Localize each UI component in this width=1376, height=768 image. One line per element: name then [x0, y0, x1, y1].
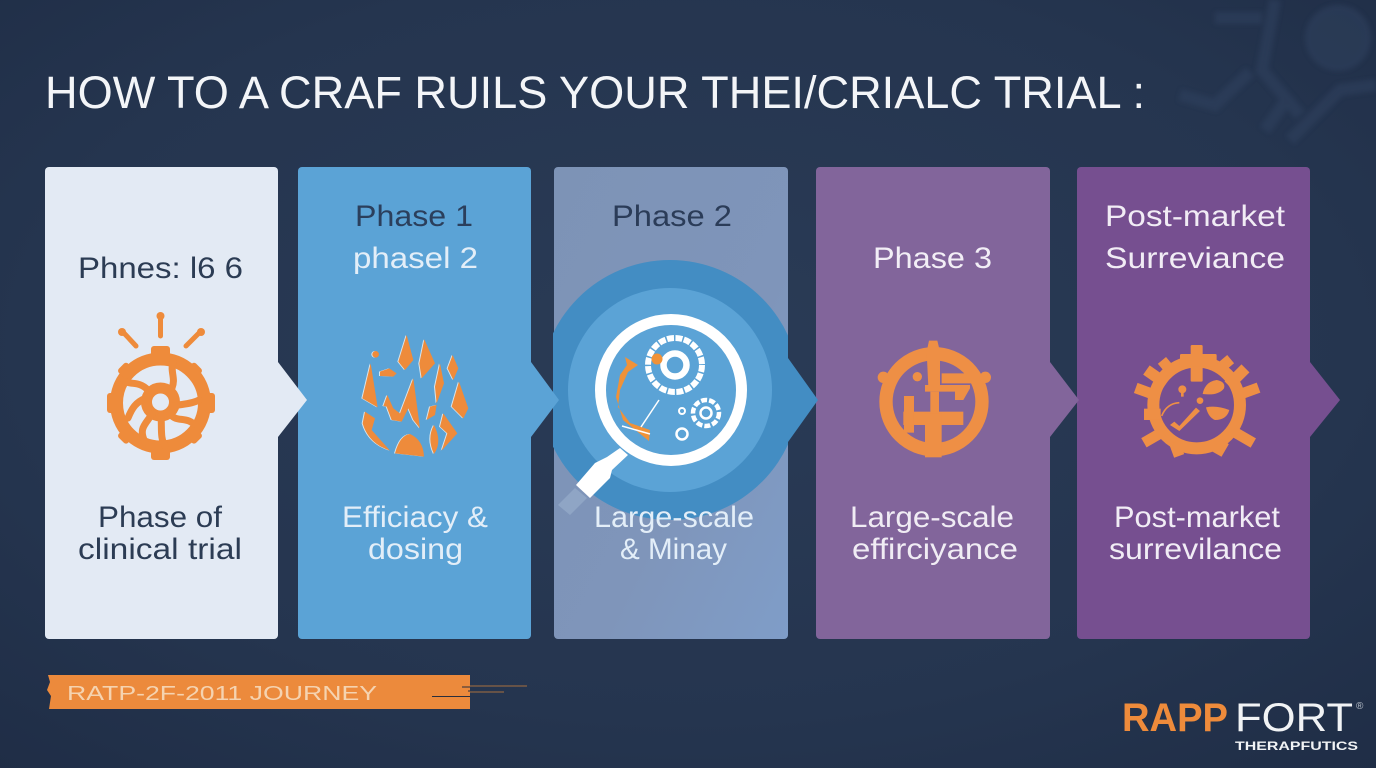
- caption: phase 3: effirciyance: [852, 533, 1018, 566]
- caption: post-market: surrevilance: [1109, 533, 1282, 566]
- caption: phase 2: [594, 501, 754, 566]
- caption: phase 3: Large-scale: [850, 501, 1014, 534]
- heading: phase 3: Phase 3: [873, 242, 992, 275]
- caption: phase 1: dosing: [368, 533, 463, 566]
- caption: phase 3: [850, 501, 1018, 566]
- heading: phase 2: Phase 2: [612, 200, 732, 233]
- heading: phase 1: phasel 2: [353, 242, 478, 275]
- panel: phase 3: [816, 167, 1079, 639]
- arrow: panel 5 exit: [1310, 362, 1340, 437]
- caption: phase 1: Efficiacy &: [342, 501, 488, 534]
- heading: post-market: Surreviance: [1105, 242, 1285, 275]
- caption: post-market: Post-market: [1114, 501, 1281, 534]
- small gear: [693, 400, 719, 426]
- arrow: panel 4 to panel 5: [1050, 362, 1079, 437]
- panel: phase 2: [540, 167, 818, 639]
- heading: phase 1: [353, 200, 478, 275]
- caption: phase 2: & Minay: [620, 533, 727, 566]
- decorative faint gears, top right: [1180, 0, 1376, 140]
- caption: panel 1: [78, 501, 242, 566]
- panel: phase 1: [298, 167, 559, 639]
- caption: phase 2: Large-scale: [594, 501, 754, 534]
- logo: Rappfort Therapeutics: FORT: [1235, 696, 1353, 740]
- orange crescent: [616, 357, 650, 441]
- logo: Rappfort Therapeutics: THERAPFUTICS: [1235, 739, 1358, 753]
- heading: post-market: [1105, 200, 1286, 275]
- heading: panel 1: Phnes: l6 6: [78, 252, 243, 285]
- journey banner: [47, 675, 527, 709]
- icon: orange gear with rays: [107, 312, 215, 460]
- panel: phase overview: [45, 167, 307, 639]
- caption: post-market: [1109, 501, 1282, 566]
- arrow: panel 2 to panel 3: [531, 362, 559, 437]
- logo: Rappfort Therapeutics: [1122, 696, 1364, 753]
- caption: phase 1: [342, 501, 488, 566]
- panel: post-market: [1077, 167, 1340, 639]
- caption: panel 1: clinical trial: [78, 533, 242, 566]
- icon: orange flame shards: [362, 335, 468, 457]
- heading: post-market: Post-market: [1105, 200, 1286, 233]
- icon: magnifier on blue circle: [540, 260, 818, 520]
- title: HOW TO A CRAF RUILS YOUR THEI/CRIALC TRIAL :: [45, 67, 1145, 118]
- heading: phase 1: Phase 1: [355, 200, 473, 233]
- journey banner: RATP-2F-2011 JOURNEY: [67, 683, 377, 705]
- big gear: [648, 338, 702, 392]
- caption: panel 1: Phase of: [98, 501, 223, 534]
- logo: Rappfort Therapeutics: RAPP: [1122, 696, 1228, 740]
- arrow: panel 1 to panel 2: [278, 362, 307, 437]
- icon: orange gear with check mark: [1134, 345, 1260, 458]
- logo: Rappfort Therapeutics: ®: [1356, 701, 1364, 712]
- icon: orange gear with cross: [878, 341, 991, 457]
